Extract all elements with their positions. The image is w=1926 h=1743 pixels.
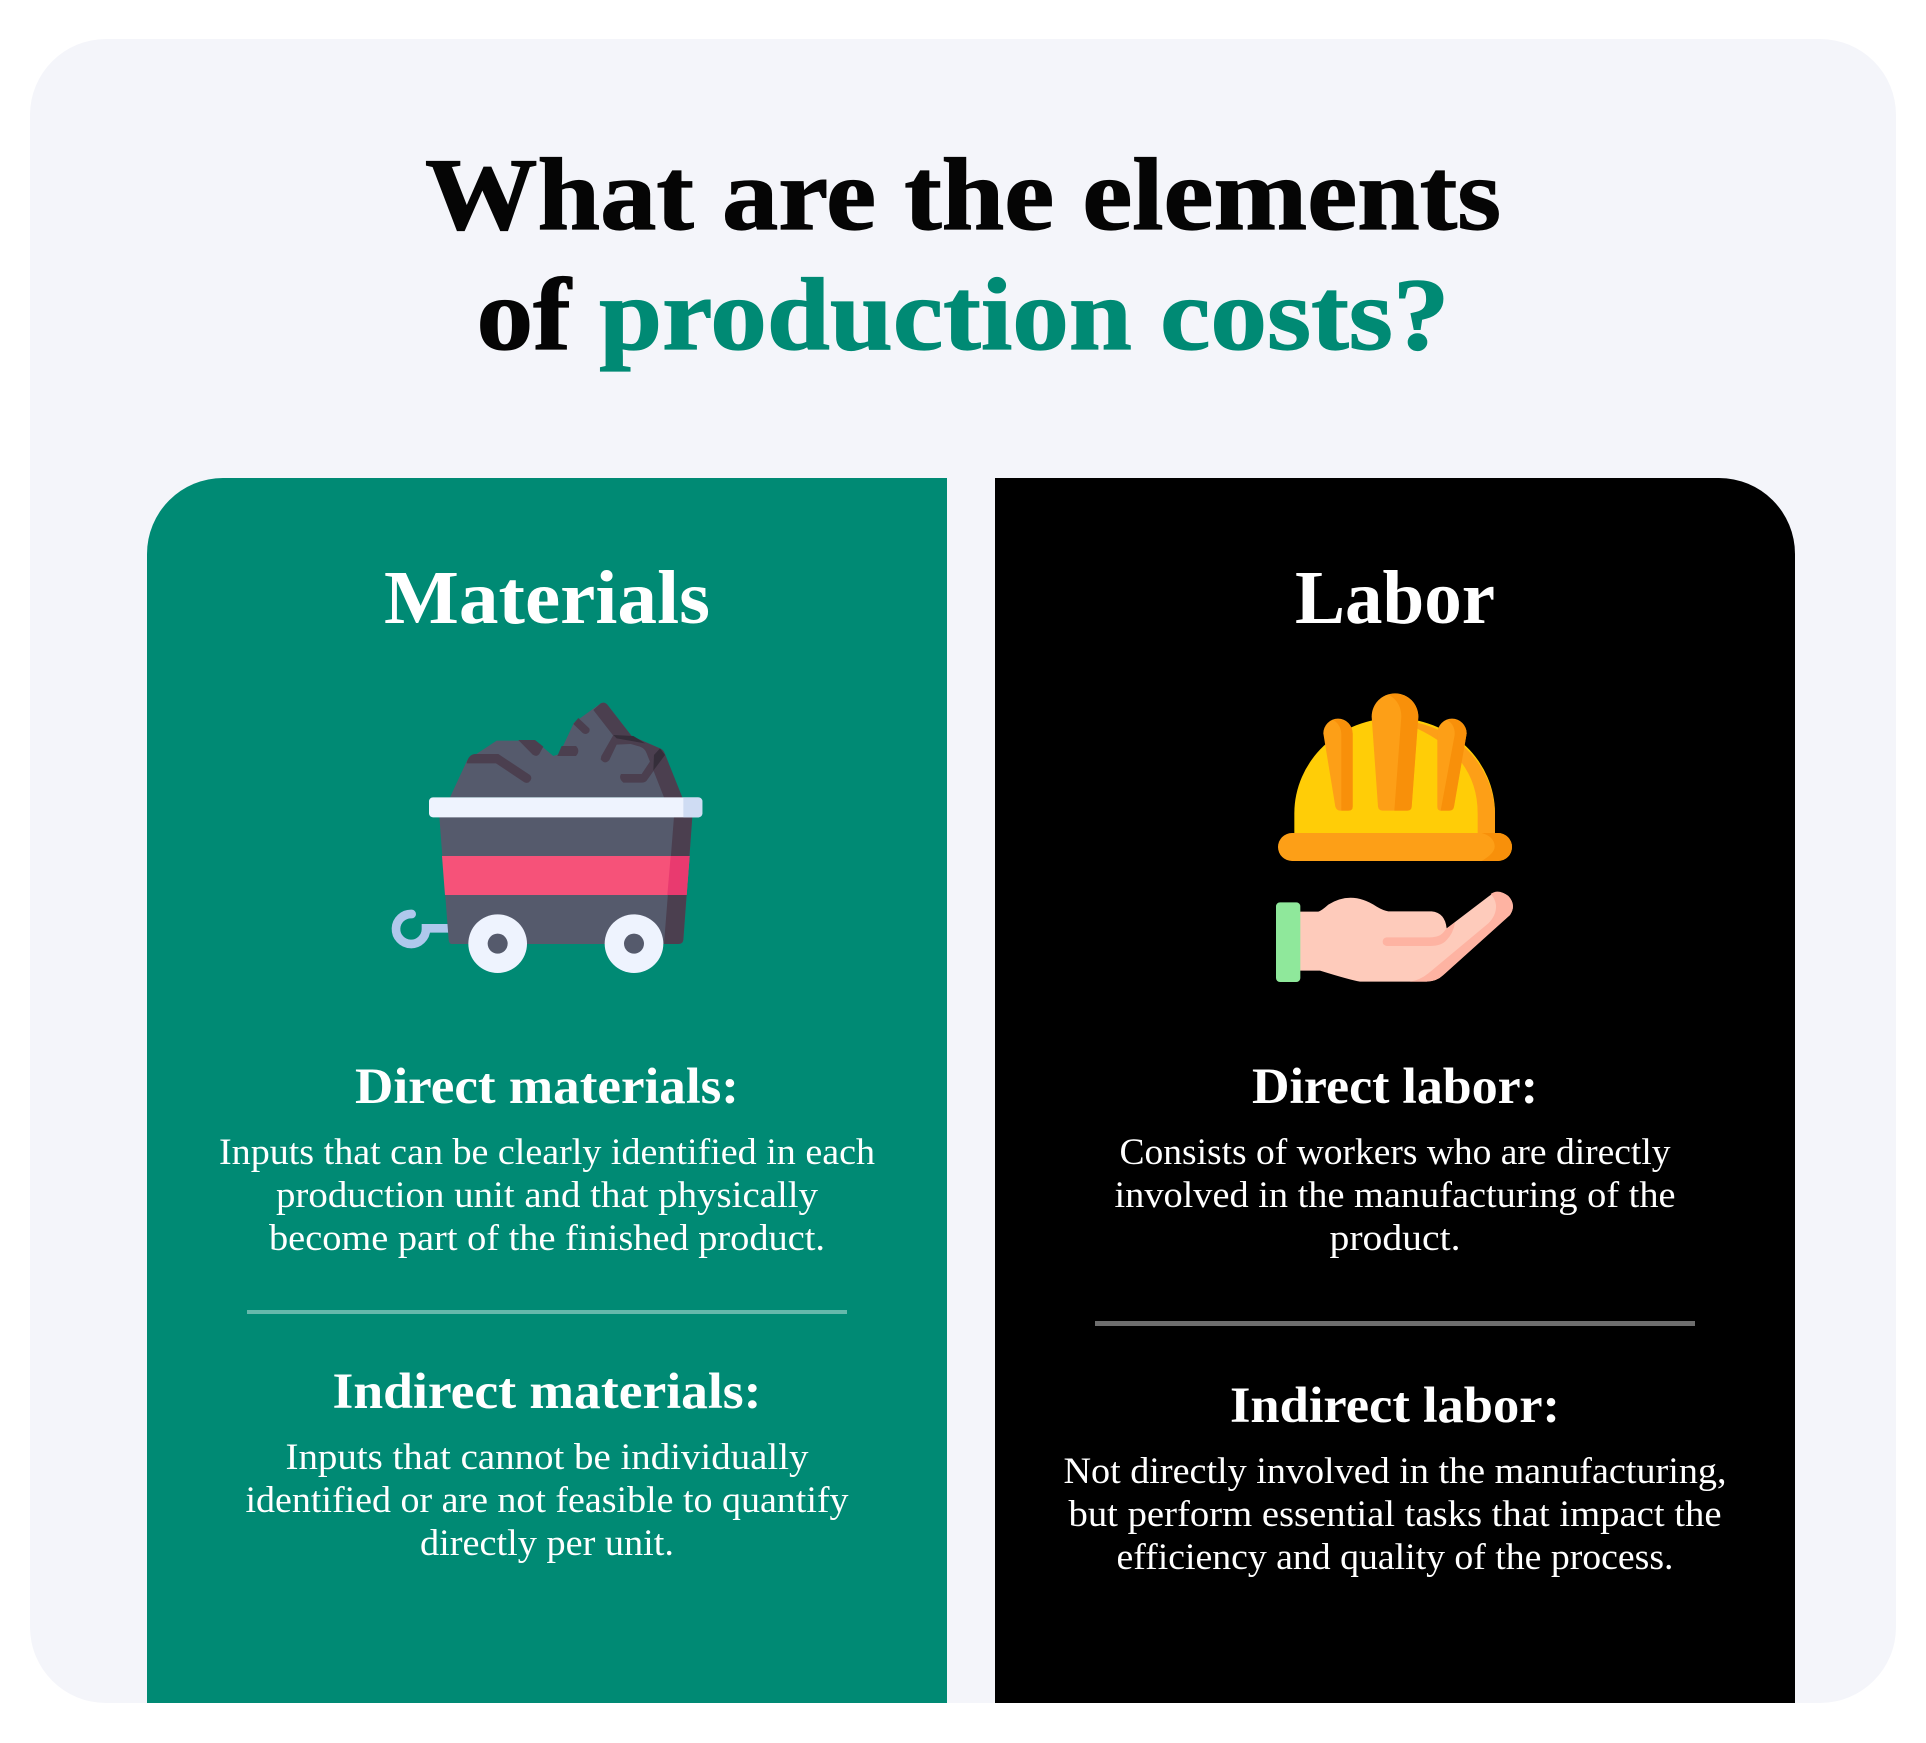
text: indirect labor: Indirect labor: [1230, 1378, 1560, 1434]
text: indirect materials: identified or are not feasible to quantify [246, 1479, 849, 1520]
text: indirect materials: directly per unit. [420, 1522, 674, 1563]
text: direct materials: Inputs that can be clearly identified in each [219, 1131, 875, 1172]
text: indirect labor [1064, 1378, 1726, 1577]
text: direct labor: product. [1330, 1217, 1460, 1258]
text: direct labor: Direct labor: [1252, 1059, 1538, 1115]
icon: mine cart with coal [396, 703, 702, 973]
title [425, 138, 1501, 372]
divider: materials [247, 1310, 847, 1314]
text: indirect materials: Indirect materials: [332, 1364, 762, 1420]
panel: materials [147, 478, 947, 1703]
heading: materials: Materials [384, 556, 710, 640]
heading: labor: Labor [1295, 556, 1495, 640]
divider: labor [1095, 1321, 1695, 1326]
panel: labor [995, 478, 1795, 1703]
text: indirect materials: Inputs that cannot be individually [286, 1436, 809, 1477]
text: indirect labor: but perform essential tasks that impact the [1068, 1493, 1722, 1534]
text: direct materials: production unit and that physically [276, 1174, 819, 1215]
text: direct labor: involved in the manufacturing of the [1114, 1174, 1676, 1215]
text: direct materials: become part of the finished product. [269, 1217, 825, 1258]
text: indirect materials [246, 1364, 849, 1563]
title: What are the elements [425, 138, 1501, 252]
icon: hard hat over hand [1276, 693, 1513, 982]
text: direct labor: Consists of workers who are directly [1120, 1131, 1671, 1172]
text: direct materials: Direct materials: [355, 1059, 739, 1115]
text: direct labor [1114, 1059, 1676, 1258]
text: indirect labor: efficiency and quality of the process. [1116, 1536, 1674, 1577]
text: direct materials [219, 1059, 875, 1258]
text: indirect labor: Not directly involved in the manufacturing, [1064, 1450, 1726, 1491]
title: of production costs? [476, 258, 1450, 372]
